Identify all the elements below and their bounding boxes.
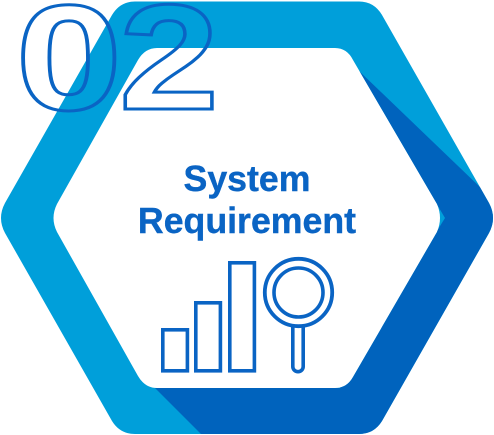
number 02: [16, 0, 219, 142]
dark blue shadow band: [155, 69, 494, 435]
icon: magnifying glass: [265, 259, 332, 372]
outer lens ring: [265, 259, 332, 326]
icon: bar chart: [163, 263, 254, 371]
bar 3: [230, 263, 254, 371]
bar 1: [163, 330, 187, 371]
title line 2: Requirement: [138, 201, 356, 241]
bar 2: [196, 303, 220, 371]
title: [138, 159, 356, 241]
handle: [293, 326, 303, 372]
title line 1: System: [184, 159, 310, 199]
inner lens ring: [274, 268, 323, 317]
